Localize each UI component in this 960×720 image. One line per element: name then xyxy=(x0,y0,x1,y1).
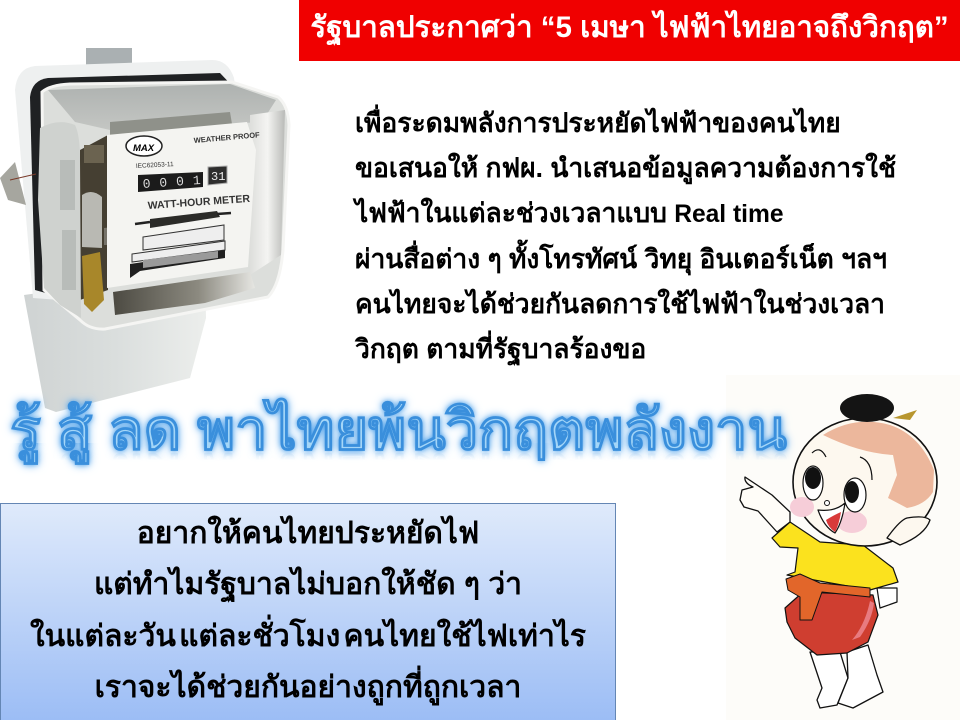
eyes xyxy=(803,466,823,500)
illustration: electricity meter xyxy=(0,48,290,412)
legs xyxy=(810,645,883,708)
yellow shirt xyxy=(772,522,898,590)
question callout: ในแต่ละวัน แต่ละชั่วโมง คนไทยใช้ไฟเท่าไร xyxy=(30,620,586,653)
head xyxy=(793,418,937,546)
main paragraph: เพื่อระดมพลังการประหยัดไฟฟ้าของคนไทย xyxy=(355,108,841,138)
pointing arm xyxy=(740,477,790,532)
meter nameplate xyxy=(107,122,256,288)
question callout: เราจะได้ช่วยกันอย่างถูกที่ถูกเวลา xyxy=(95,671,521,704)
illustration: electricity meter: MAX xyxy=(133,143,155,154)
header banner xyxy=(299,0,960,61)
main paragraph: ผ่านสื่อต่าง ๆ ทั้งโทรทัศน์ วิทยุ อินเตอร์เน็ต ฯลฯ xyxy=(355,244,887,274)
mouth xyxy=(818,503,845,533)
main paragraph: ขอเสนอให้ กฟผ. นำเสนอข้อมูลความต้องการใช้ xyxy=(355,153,896,183)
illustration: electricity meter: WEATHER PROOF xyxy=(193,130,260,145)
illustration: electricity meter: WATT-HOUR METER xyxy=(147,193,251,212)
header banner: รัฐบาลประกาศว่า “5 เมษา ไฟฟ้าไทยอาจถึงวิกฤต” xyxy=(310,11,949,44)
main paragraph: ไฟฟ้าในแต่ละช่วงเวลาแบบ Real time xyxy=(355,198,784,228)
illustration: cartoon child pointing xyxy=(739,394,938,709)
illustration: electricity meter: 31 xyxy=(211,170,225,184)
illustration: electricity meter: IEC62053-11 xyxy=(136,161,174,170)
cheeks xyxy=(790,497,814,517)
slogan heading: รู้ สู้ ลด พาไทยพ้นวิกฤตพลังงาน xyxy=(10,398,787,461)
sash xyxy=(786,574,870,620)
illustration: electricity meter: 0001 xyxy=(142,173,201,192)
main paragraph: คนไทยจะได้ช่วยกันลดการใช้ไฟฟ้าในช่วงเวลา xyxy=(355,289,885,319)
main paragraph xyxy=(352,104,896,366)
question callout xyxy=(0,503,616,720)
question callout: อยากให้คนไทยประหยัดไฟ xyxy=(137,517,479,550)
hair bun xyxy=(840,394,894,422)
question callout: แต่ทำไมรัฐบาลไม่บอกให้ชัด ๆ ว่า xyxy=(94,568,522,601)
back hand xyxy=(877,588,897,608)
main paragraph: วิกฤต ตามที่รัฐบาลร้องขอ xyxy=(355,334,646,364)
red trousers xyxy=(785,592,878,655)
ear xyxy=(887,517,930,545)
nose xyxy=(824,500,830,506)
brows xyxy=(812,450,872,480)
